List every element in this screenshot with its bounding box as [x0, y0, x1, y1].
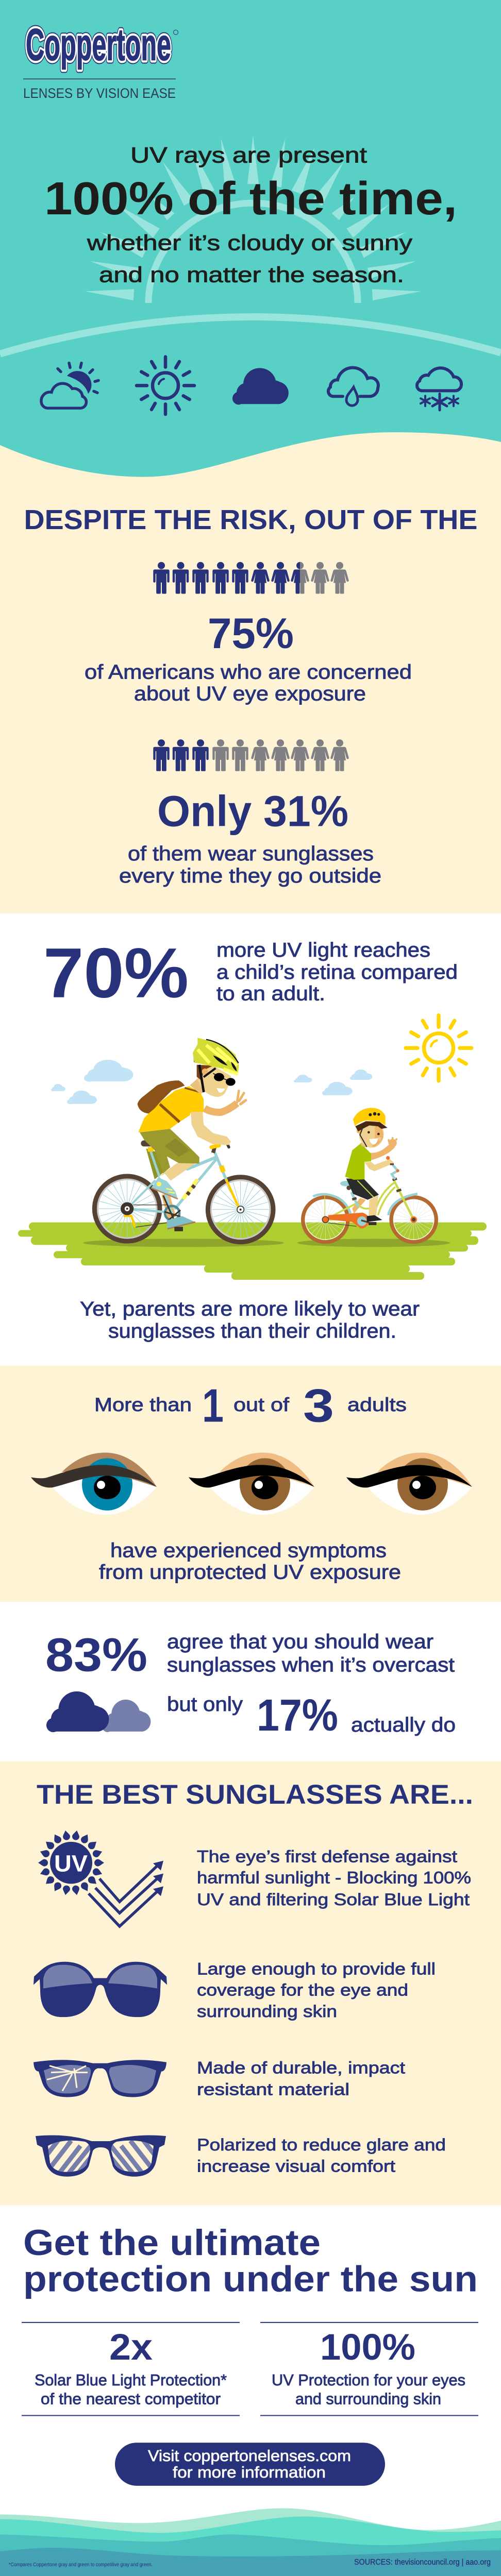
text: first defense: UV and filtering Solar Blue Light	[197, 1890, 470, 1909]
chart: people row 31 percent	[153, 739, 349, 771]
text: durable: Made of durable, impact	[197, 2058, 405, 2077]
card: 100%: UV Protection for your eyes	[272, 2371, 465, 2389]
card: 100%	[260, 2323, 478, 2415]
text: more than 1 out of 3 adults: 3	[303, 1380, 334, 1432]
logo: Coppertone	[26, 20, 178, 70]
icon: large sunglasses	[34, 1962, 167, 2017]
heading: UV rays: and no matter the season.	[99, 262, 404, 286]
text: of them wear	[119, 843, 381, 887]
text: have experienced: from unprotected UV exposure	[99, 1561, 401, 1583]
heading: UV rays	[44, 143, 457, 286]
card: 2x: of the nearest competitor	[41, 2390, 221, 2408]
text: more UV light: more UV light reaches	[216, 939, 430, 961]
icon: partly cloudy	[41, 363, 98, 408]
footnote: *Compares Coppertone gray and green to competitive gray and green.	[9, 2562, 153, 2568]
icon: rain cloud	[328, 368, 378, 405]
text: more than 1 out of 3 adults: out of	[233, 1394, 290, 1415]
text: large enough: coverage for the eye and	[197, 1980, 408, 1999]
panel: 1 out of 3 adults	[31, 1380, 472, 1583]
button: visit website: Visit coppertonelenses.com	[148, 2447, 351, 2465]
heading: despite the risk: DESPITE THE RISK, OUT OF THE	[24, 504, 477, 535]
text: of Americans: of Americans who are concerned	[85, 662, 412, 684]
stat: only 31%: Only 31%	[157, 786, 348, 835]
text: large enough: Large enough to provide full	[197, 1959, 436, 1978]
text: more than 1 out of 3 adults: adults	[347, 1394, 407, 1415]
text: more than 1 out of 3 adults: More than	[94, 1394, 192, 1415]
panel: overcast	[45, 1629, 456, 1740]
panel: footer waves	[0, 2508, 501, 2573]
text: of them wear: of them wear sunglasses	[128, 843, 374, 865]
text: more UV light: to an adult.	[216, 983, 325, 1005]
heading: UV rays: UV rays are present	[130, 143, 367, 167]
card: 100%: and surrounding skin	[295, 2390, 441, 2408]
text: of Americans: about UV eye exposure	[134, 683, 366, 705]
text: polarized: increase visual comfort	[197, 2157, 395, 2176]
icon: cloud	[232, 368, 289, 404]
text: durable	[197, 2058, 405, 2098]
text: of Americans	[85, 662, 412, 705]
logo: Coppertone: Coppertone	[26, 20, 171, 70]
heading: best sunglasses: THE BEST SUNGLASSES ARE...	[37, 1780, 473, 1810]
logo subtitle: LENSES BY VISION EASE	[23, 86, 176, 101]
text: agree	[167, 1631, 455, 1676]
text: have experienced: have experienced symptoms	[110, 1540, 387, 1562]
card: 2x: 2x	[109, 2327, 153, 2368]
text: actually do: actually do	[351, 1714, 456, 1736]
icon: clouds	[46, 1691, 151, 1732]
text: yet parents	[80, 1298, 420, 1343]
text: first defense	[197, 1847, 471, 1909]
logo: Coppertone: Coppertone	[26, 20, 171, 70]
icon: snow cloud	[417, 368, 461, 410]
text: but only: but only	[167, 1693, 243, 1716]
card: 100%: 100%	[320, 2327, 415, 2368]
text: yet parents: Yet, parents are more likely to wear	[80, 1298, 420, 1320]
icon: yellow sun	[406, 1015, 472, 1081]
heading: get the ultimate protection	[23, 2223, 478, 2300]
text: large enough: surrounding skin	[197, 2002, 337, 2021]
panel: teal header	[0, 0, 501, 477]
card: 2x	[22, 2323, 240, 2415]
heading: UV rays: 100% of the time,	[44, 173, 457, 225]
illustration: child on bicycle	[303, 1108, 436, 1242]
text: of them wear: every time they go outside	[119, 865, 381, 887]
stat: 70%: 70%	[43, 934, 189, 1013]
button: visit website: for more information	[173, 2463, 326, 2481]
icon: UV sun with arrows: UV	[54, 1850, 88, 1877]
icon: impact resistant sunglasses	[34, 2060, 166, 2097]
panel: ultimate protection	[22, 2223, 478, 2486]
illustration: father on bicycle	[94, 1038, 273, 1242]
ground grass	[18, 1223, 487, 1280]
heading: get the ultimate protection: protection under the sun	[23, 2259, 478, 2300]
heading: get the ultimate protection: Get the ultimate	[23, 2223, 321, 2263]
text: agree: sunglasses when it’s overcast	[167, 1654, 455, 1676]
icon: brown eye	[189, 1452, 314, 1515]
card: 2x: Solar Blue Light Protection*	[35, 2371, 227, 2389]
icon: sky clouds	[51, 1060, 372, 1104]
text: first defense: The eye’s first defense against	[197, 1847, 457, 1866]
icon: polarized sunglasses	[36, 2135, 166, 2179]
logo: Coppertone: Coppertone	[26, 20, 171, 70]
text: large enough	[197, 1959, 436, 2021]
chart: people row 75 percent	[153, 562, 349, 594]
panel: 70 percent children	[18, 934, 487, 1343]
text: more UV light: a child’s retina compared	[216, 961, 458, 984]
stat: 75%: 75%	[208, 609, 294, 657]
text: more than 1 out of 3 adults: 1	[202, 1380, 224, 1432]
icon: horizon arc	[0, 317, 501, 354]
text: agree: agree that you should wear	[167, 1631, 433, 1653]
text: durable: resistant material	[197, 2080, 349, 2098]
text: polarized: Polarized to reduce glare and	[197, 2135, 446, 2154]
text: more UV light	[216, 939, 458, 1005]
icon: sun	[137, 357, 194, 414]
panel: despite the risk	[24, 504, 477, 887]
heading: UV rays: whether it’s cloudy or sunny	[87, 231, 412, 255]
icon: sun rays background	[85, 135, 422, 303]
stat: 17%: 17%	[257, 1690, 338, 1740]
logo rule	[23, 78, 176, 79]
text: have experienced	[99, 1540, 401, 1583]
text: polarized	[197, 2135, 446, 2176]
text: yet parents: sunglasses than their children.	[108, 1320, 396, 1342]
icon: brown eye	[346, 1452, 472, 1515]
icon: UV sun with arrows	[38, 1830, 163, 1926]
stat: 83%: 83%	[45, 1629, 147, 1681]
icon: blue eye	[31, 1452, 157, 1515]
text: more than 1 out of 3 adults	[94, 1380, 407, 1432]
half figure overlay	[300, 562, 309, 594]
text: first defense: harmful sunlight - Blocking 100%	[197, 1868, 471, 1887]
panel: the best sunglasses	[34, 1780, 473, 2179]
button: visit website	[115, 2443, 385, 2486]
